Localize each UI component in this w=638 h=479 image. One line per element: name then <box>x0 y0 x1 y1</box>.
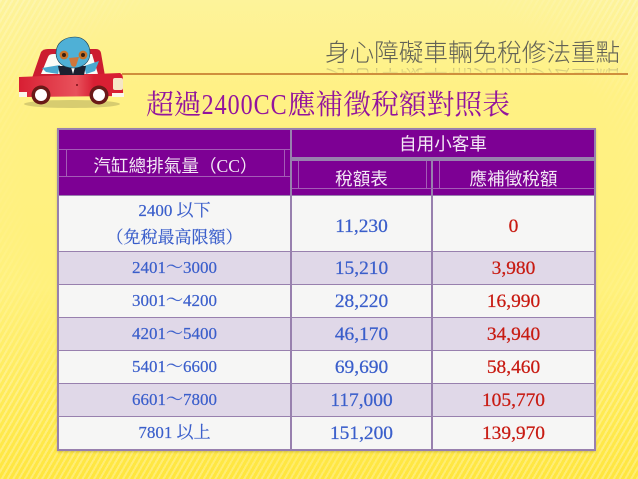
value: 151,200 <box>330 423 393 444</box>
value: 28,220 <box>335 291 388 312</box>
value <box>433 351 594 383</box>
table header: tax amount: 稅額表 <box>335 168 388 188</box>
table row: up to 2400: （免稅最高限額） <box>106 228 242 246</box>
bird <box>42 65 60 74</box>
value <box>292 285 431 317</box>
table row: up to 2400 <box>59 196 290 251</box>
value <box>433 252 594 284</box>
table header: private passenger car: 自用小客車 <box>399 134 487 154</box>
value: 58,460 <box>487 357 540 378</box>
value: 34,940 <box>487 324 540 345</box>
value <box>292 252 431 284</box>
table row: up to 2400: 2400 以下 <box>138 200 211 220</box>
value <box>433 417 594 449</box>
value: 15,210 <box>335 258 388 279</box>
value: 11,230 <box>335 216 388 236</box>
value: 16,990 <box>487 291 540 312</box>
value <box>292 318 431 350</box>
subtitle: 2400CC <box>202 90 288 121</box>
car body <box>19 73 123 97</box>
value: 139,970 <box>482 423 545 444</box>
value <box>433 285 594 317</box>
table row: 3001-4200 <box>59 285 290 317</box>
car roof and windows <box>32 49 105 78</box>
table row: 5401-6600 <box>59 351 290 383</box>
table row: 6601-7800 <box>59 384 290 416</box>
table row: 3001-4200: 3001～4200 <box>132 291 217 310</box>
title: 身心障礙車輛免稅修法重點 <box>325 40 620 67</box>
value <box>292 351 431 383</box>
table row: 7801 and above <box>59 417 290 449</box>
icon: blue bird driving red car <box>19 36 124 108</box>
value <box>292 196 431 251</box>
value <box>433 384 594 416</box>
panel: tax comparison table <box>57 128 596 451</box>
table header: displacement <box>59 130 290 195</box>
table header: additional tax due <box>433 161 594 195</box>
value: 0 <box>509 216 518 236</box>
car shadow <box>24 100 120 108</box>
value <box>292 417 431 449</box>
value: 69,690 <box>335 357 388 378</box>
table row: 4201-5400: 4201～5400 <box>132 324 217 343</box>
table row: 5401-6600: 5401～6600 <box>132 357 217 376</box>
wheels <box>32 86 50 104</box>
value: 46,170 <box>335 324 388 345</box>
value <box>433 318 594 350</box>
table header: additional tax due: 應補徵稅額 <box>470 168 557 188</box>
table row: 7801 and above: 7801 以上 <box>138 423 211 442</box>
table header: tax amount <box>292 161 431 195</box>
value: 117,000 <box>330 390 393 411</box>
value: 3,980 <box>492 258 535 279</box>
value: 105,770 <box>482 390 545 411</box>
table row: 2401-3000 <box>59 252 290 284</box>
table row: 2401-3000: 2401～3000 <box>132 258 217 277</box>
table header: private passenger car <box>292 130 594 157</box>
value <box>433 196 594 251</box>
table header: displacement: 汽缸總排氣量（CC） <box>93 156 258 176</box>
table row: 6601-7800: 6601～7800 <box>132 390 217 409</box>
table row: 4201-5400 <box>59 318 290 350</box>
value <box>292 384 431 416</box>
subtitle: 超過 應補徵稅額對照表 <box>146 90 510 121</box>
